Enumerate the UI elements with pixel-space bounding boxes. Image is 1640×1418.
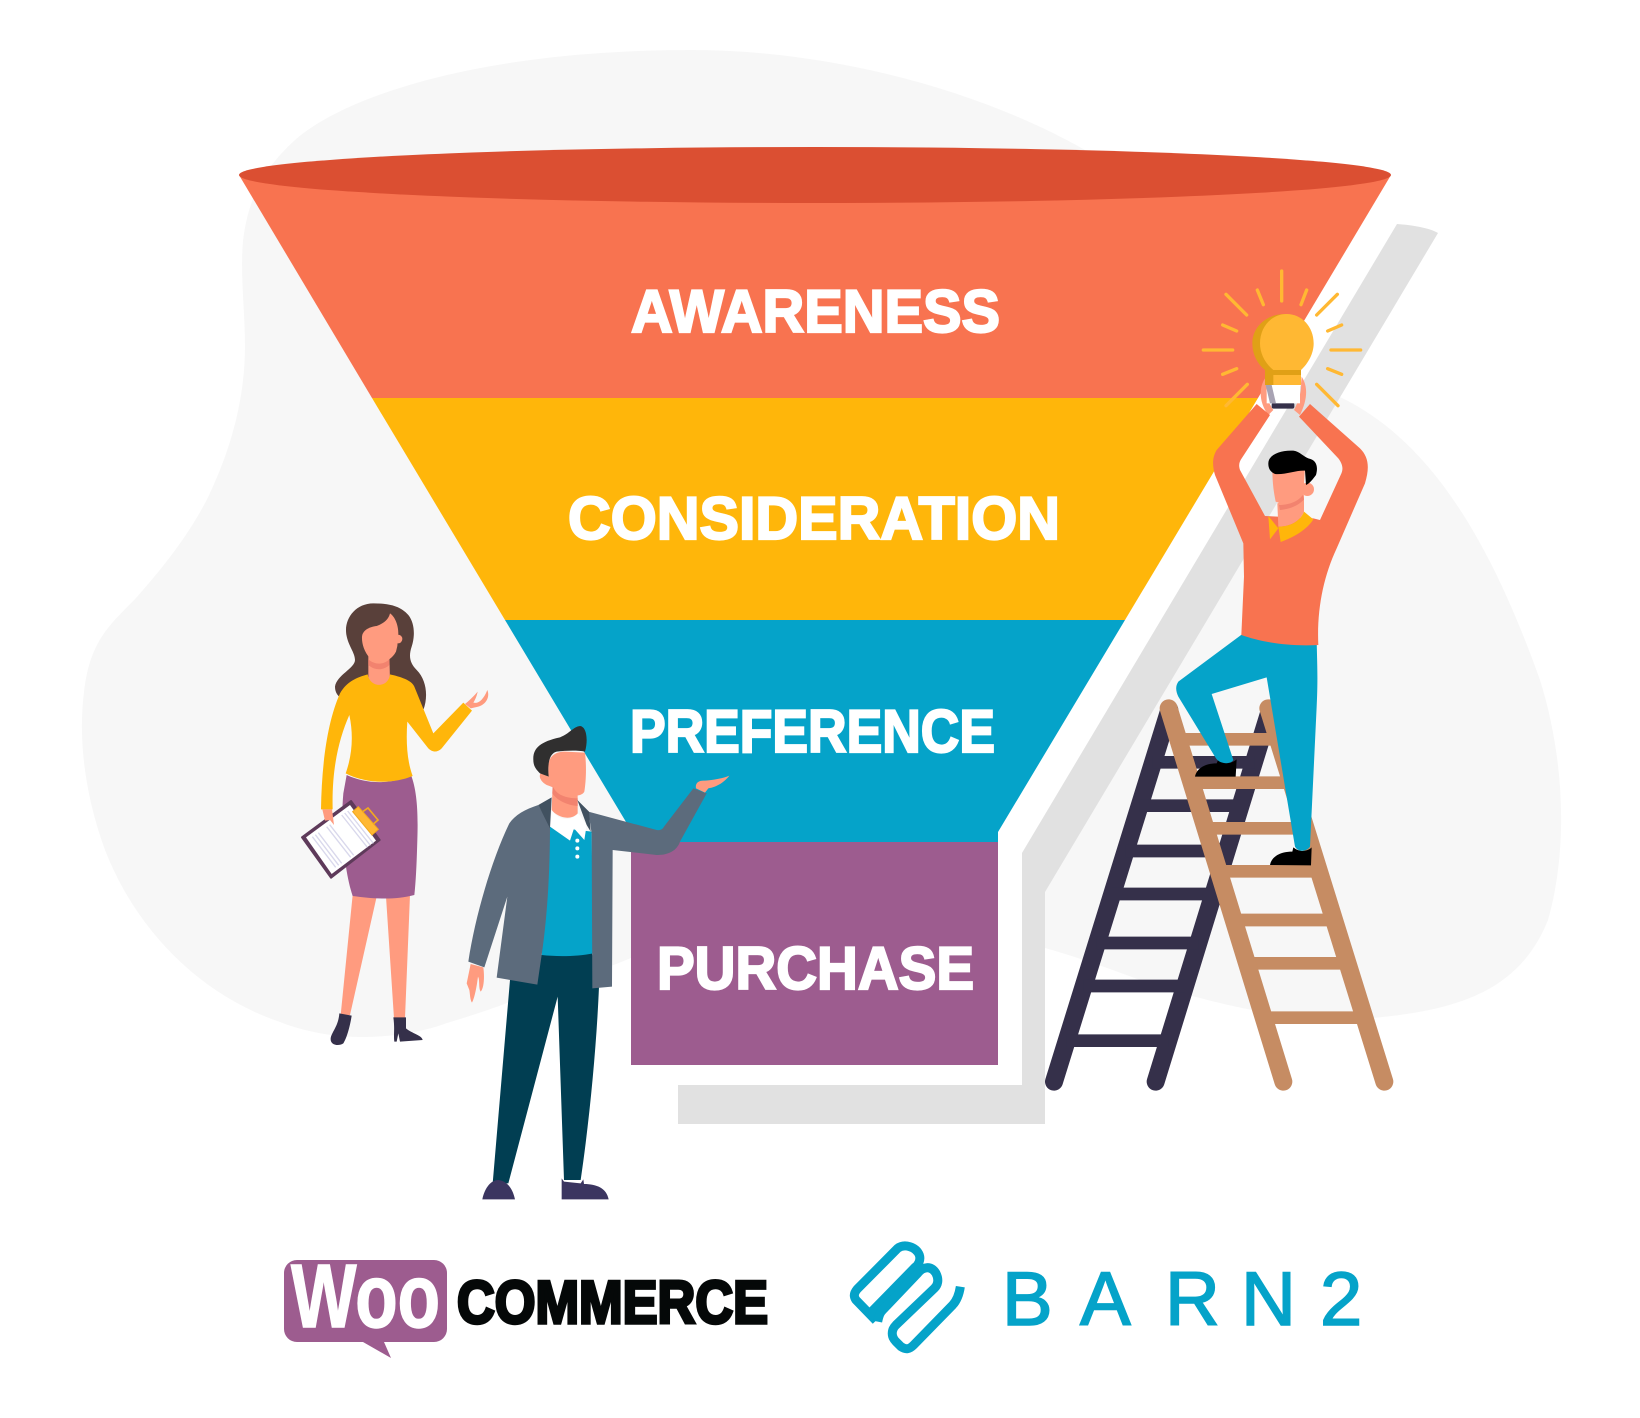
- man lapels: [538, 797, 591, 832]
- funnel: [239, 147, 1391, 1065]
- barn2 wordmark: BARN2: [1002, 1257, 1362, 1342]
- man on ladder: [1176, 271, 1368, 865]
- clipboard: [302, 801, 380, 878]
- man legs and shoes: [1176, 633, 1317, 865]
- woman legs: [341, 895, 410, 1018]
- tan ladder: [1169, 708, 1384, 1082]
- commerce wordmark: COMMERCE: [457, 1269, 768, 1336]
- funnel band: preference: [505, 620, 1125, 842]
- barn2 logo: [854, 1246, 1362, 1349]
- label: consideration: CONSIDERATION: [568, 485, 1060, 552]
- dark ladder: [1054, 710, 1270, 1082]
- man shirt: [542, 827, 593, 956]
- woman neck: [368, 653, 390, 686]
- man torso and head: [1213, 377, 1368, 645]
- woman with clipboard: [302, 603, 488, 1045]
- man hair: [533, 726, 587, 777]
- woo speech bubble: [284, 1260, 447, 1358]
- funnel shadow: [678, 224, 1438, 1124]
- white funnel outline: [631, 200, 1397, 1088]
- woman hair: [335, 603, 426, 710]
- funnel opening: [239, 147, 1391, 203]
- woman sweater: [321, 674, 472, 809]
- light bulb: [1203, 271, 1361, 409]
- label: purchase: PURCHASE: [657, 935, 974, 1002]
- man jacket: [468, 805, 550, 985]
- label: awareness: AWARENESS: [631, 278, 1000, 345]
- woman clipboard hand: [322, 809, 334, 825]
- woman hand: [465, 690, 488, 708]
- funnel band: purchase: [631, 842, 998, 1065]
- man shoes: [482, 1178, 609, 1199]
- woman face: [362, 613, 398, 662]
- man neck: [552, 785, 578, 818]
- woman boots: [331, 1013, 423, 1045]
- man face: [540, 752, 586, 796]
- barn2 icon: [854, 1246, 960, 1349]
- woo wordmark: Woo: [291, 1247, 440, 1347]
- background blob: [82, 50, 1561, 1037]
- woman skirt: [342, 775, 418, 899]
- man in jacket: [467, 726, 729, 1199]
- woocommerce logo: [284, 1247, 768, 1358]
- man trousers: [493, 952, 599, 1183]
- label: preference: PREFERENCE: [630, 698, 995, 765]
- man buttons: [575, 839, 579, 859]
- funnel band: awareness: [239, 175, 1391, 398]
- man hands: [467, 776, 729, 1003]
- man collar: [550, 810, 587, 841]
- woman ear: [394, 635, 402, 643]
- funnel band: consideration: [372, 398, 1258, 620]
